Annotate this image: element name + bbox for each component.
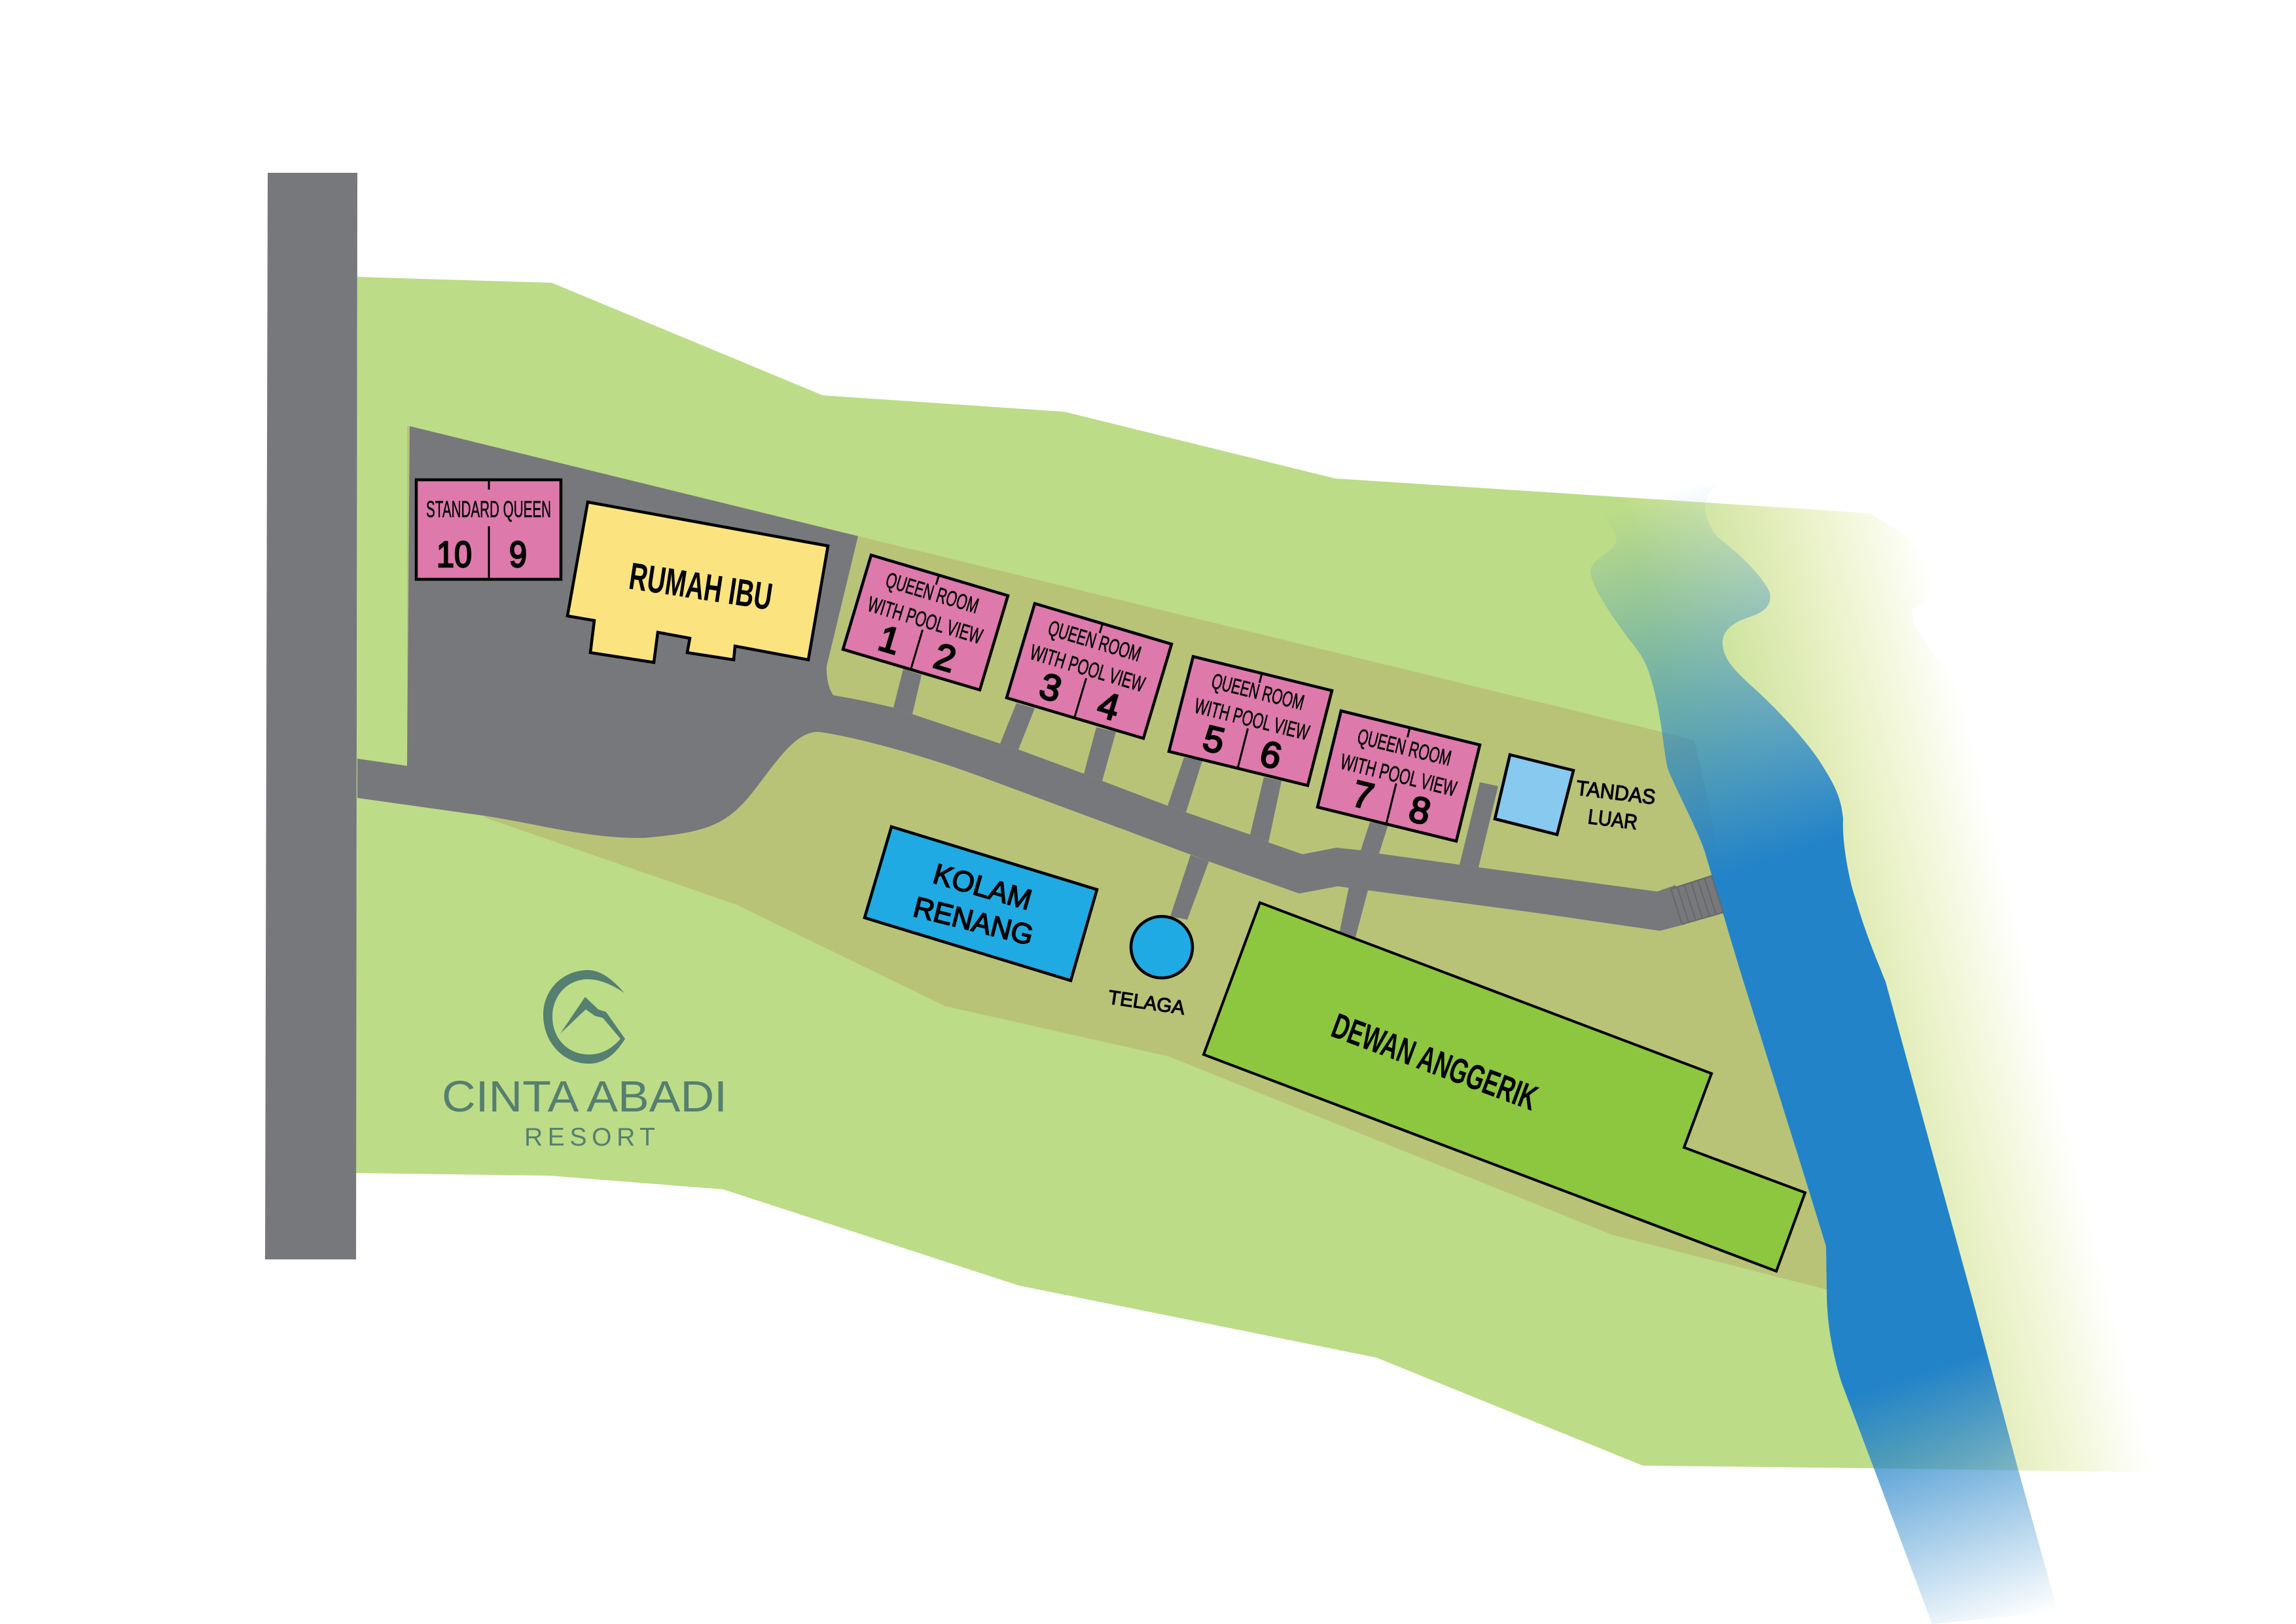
logo subtitle: RESORT <box>524 1123 655 1151</box>
main road on the left <box>265 173 357 1259</box>
building: queen rooms 1 and 2: QUEEN ROOM <box>883 568 982 618</box>
building: Rumah Ibu: RUMAH IBU <box>626 555 775 619</box>
building: queen rooms 7 and 8: 8 <box>1405 787 1435 833</box>
label: Tandas Luar: LUAR <box>1587 804 1639 834</box>
building: queen rooms 5 and 6: WITH POOL VIEW <box>1192 693 1312 745</box>
swimming pool <box>865 827 1097 981</box>
pond <box>1107 916 1193 1019</box>
logo crescent <box>543 970 625 1064</box>
river stairs <box>1671 876 1723 924</box>
building: queen rooms 5 and 6: 5 <box>1199 717 1229 762</box>
logo name: CINTA ABADI <box>442 1072 727 1121</box>
swimming pool: RENANG <box>910 891 1037 952</box>
logo: Cinta Abadi Resort <box>442 970 727 1151</box>
logo mountain <box>560 997 625 1039</box>
building: queen rooms 7 and 8: QUEEN ROOM <box>1355 725 1454 771</box>
building: queen rooms 7 and 8: 7 <box>1348 772 1378 818</box>
label: Tandas Luar: TANDAS <box>1575 776 1657 809</box>
car park and main pathway <box>357 426 1685 931</box>
building: queen rooms 5 and 6: QUEEN ROOM <box>1209 668 1307 715</box>
label: Tandas Luar <box>1575 776 1657 834</box>
building: standard queen rooms 10 and 9: 9 <box>509 533 527 575</box>
building: standard queen rooms 10 and 9: 10 <box>437 533 472 575</box>
building: queen rooms 5 and 6 <box>1169 657 1332 785</box>
building: Rumah Ibu <box>567 502 828 662</box>
building: queen rooms 3 and 4: QUEEN ROOM <box>1045 615 1144 666</box>
river <box>1590 483 2058 1624</box>
building: queen rooms 1 and 2: 2 <box>929 635 961 680</box>
building: queen rooms 7 and 8 <box>1318 711 1480 841</box>
building: queen rooms 3 and 4: WITH POOL VIEW <box>1028 640 1148 696</box>
resort grounds <box>407 426 1827 1290</box>
building: standard queen rooms 10 and 9: STANDARD QUEEN <box>426 497 551 522</box>
pond: TELAGA <box>1107 986 1187 1019</box>
building: queen rooms 3 and 4: 3 <box>1035 664 1066 710</box>
building: queen rooms 1 and 2 <box>843 555 1008 690</box>
building: outdoor toilet <box>1495 755 1573 835</box>
building: queen rooms 7 and 8: WITH POOL VIEW <box>1338 749 1459 802</box>
building: queen rooms 1 and 2: WITH POOL VIEW <box>865 592 986 649</box>
building: standard queen rooms 10 and 9 <box>416 480 561 579</box>
land area <box>356 277 2225 1473</box>
building: queen rooms 1 and 2: 1 <box>874 617 905 662</box>
building: queen rooms 3 and 4 <box>1007 604 1172 738</box>
building: queen rooms 5 and 6: 6 <box>1256 732 1286 777</box>
swimming pool: KOLAM <box>929 858 1035 916</box>
connecting walkways <box>893 669 1498 937</box>
hall: Dewan Anggerik: DEWAN ANGGERIK <box>1327 1006 1543 1118</box>
building: queen rooms 3 and 4: 4 <box>1093 683 1124 729</box>
hall: Dewan Anggerik <box>1204 903 1805 1271</box>
